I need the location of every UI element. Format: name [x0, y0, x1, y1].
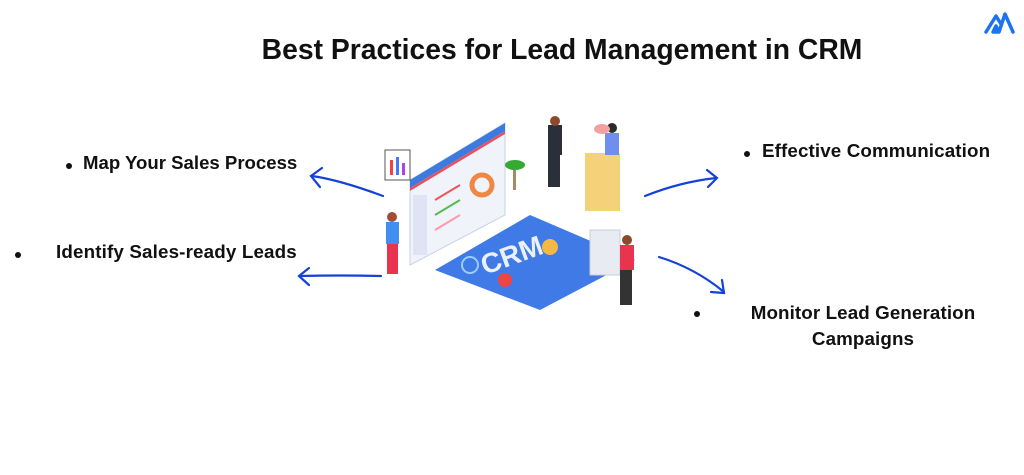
illustration: CRM scene	[384, 116, 635, 310]
arrow: to Monitor	[659, 257, 724, 293]
person right terminal	[590, 230, 634, 305]
item: Map Your Sales Process: Map Your Sales Process	[83, 152, 297, 173]
item: Monitor Lead Generation Campaigns	[694, 302, 975, 349]
arrow: to Communication	[645, 170, 717, 196]
arrow: to Identify	[299, 268, 381, 285]
logo	[984, 12, 1015, 34]
arrow: to Map	[311, 168, 383, 196]
CRM board: CRM	[476, 230, 547, 281]
person left	[386, 212, 399, 274]
item: Identify Sales-ready Leads: Identify Sales-ready Leads	[56, 241, 297, 262]
person standing	[548, 116, 562, 187]
chart card	[385, 150, 410, 180]
dashboard window	[410, 123, 505, 265]
podium person	[585, 123, 620, 211]
item: Monitor Lead Generation Campaigns: Monitor Lead Generation	[751, 302, 975, 323]
CRM board	[435, 215, 635, 310]
item: Effective Communication: Effective Communication	[762, 140, 990, 161]
palm	[505, 160, 525, 190]
item: Monitor Lead Generation Campaigns: Campaigns	[812, 328, 914, 349]
title: Best Practices for Lead Management in CRM	[262, 33, 862, 65]
